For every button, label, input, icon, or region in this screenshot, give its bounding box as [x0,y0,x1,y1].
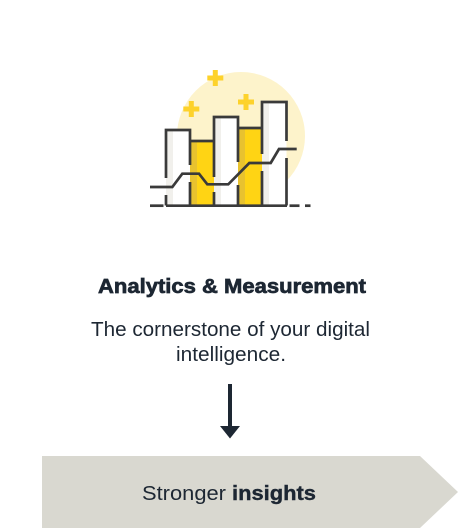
icon background circle [177,72,305,200]
arrow pointing down [220,384,240,438]
banner label: Stronger insights [142,483,316,505]
banner: stronger insights [42,456,458,528]
trend line [150,149,297,187]
bar outlines [166,102,286,206]
icon: sparkle plus signs [183,70,254,117]
baseline [150,204,310,207]
bars [166,102,286,206]
description text [91,319,370,366]
heading: Analytics & Measurement [98,276,366,298]
description text: The cornerstone of your digital [91,319,370,341]
description text: intelligence. [176,344,286,366]
icon: analytics bar chart [150,70,310,206]
